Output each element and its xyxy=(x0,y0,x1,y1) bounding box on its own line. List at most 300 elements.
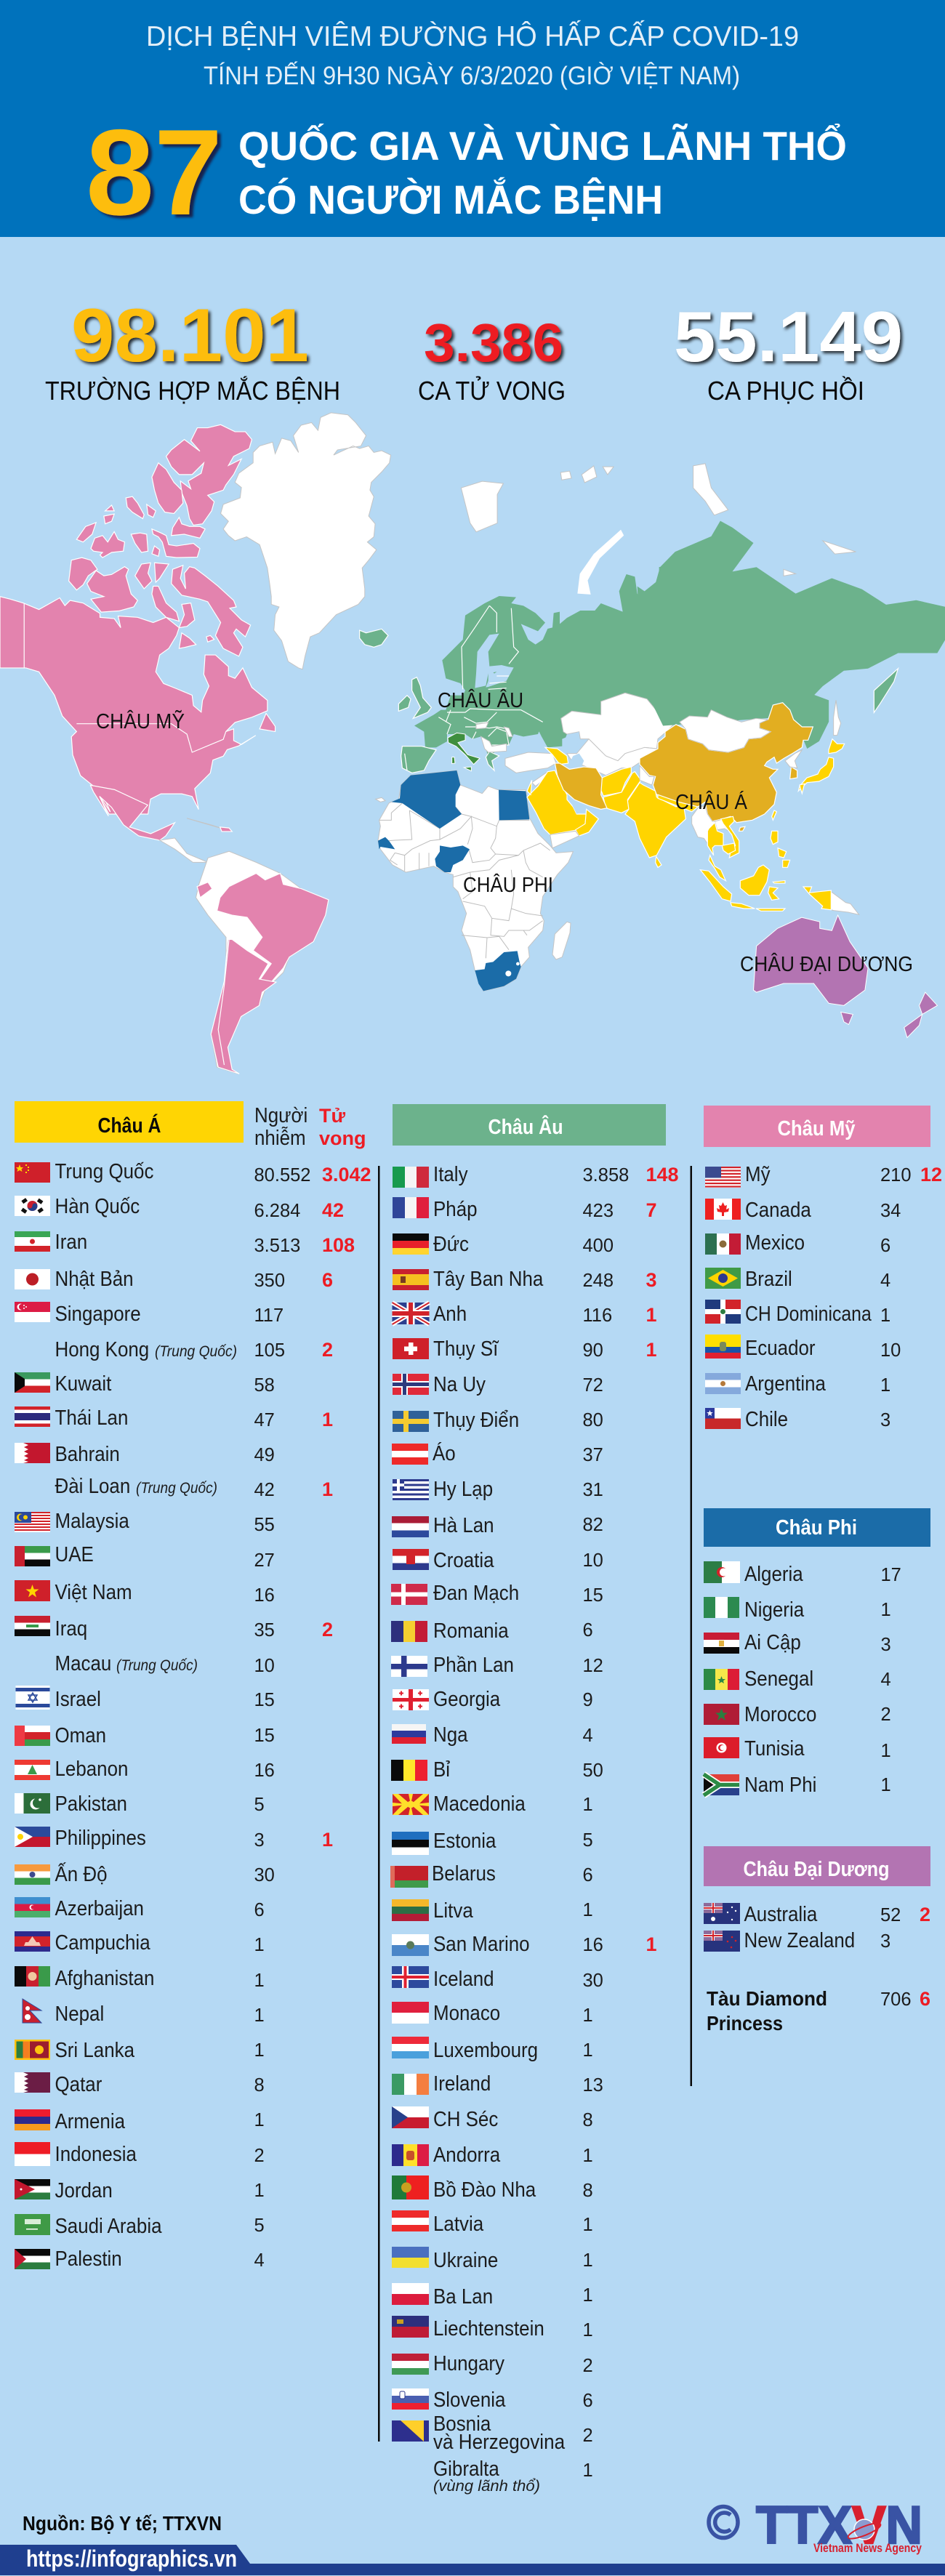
row: Hàn Quốc: 6.284 xyxy=(254,1201,300,1221)
row: Macau xyxy=(55,1651,275,1676)
row: Chile xyxy=(705,1407,890,1430)
panel: Oceania xyxy=(704,1846,930,1952)
row: Iran xyxy=(15,1230,355,1256)
heading: Châu Đại Dương: Châu Đại Dương xyxy=(743,1858,890,1881)
row: Iraq: 2 xyxy=(322,1619,333,1641)
row: New Zealand: 3 xyxy=(880,1931,890,1952)
flag: Pakistan xyxy=(15,1793,50,1814)
row: Thụy Sĩ: 90 xyxy=(583,1340,603,1361)
row: Hungary: 2 xyxy=(583,2356,593,2376)
row: Ukraine: 1 xyxy=(583,2250,593,2271)
map label: Oceania: CHÂU ĐẠI DƯƠNG xyxy=(740,952,913,976)
flag: Kuwait xyxy=(15,1372,50,1393)
flag: San Marino xyxy=(392,1934,429,1956)
row: Nam Phi xyxy=(704,1773,891,1796)
row: Italy: Italy xyxy=(433,1162,468,1186)
row: Saudi Arabia: Saudi Arabia xyxy=(55,2214,162,2237)
row: Israel: 15 xyxy=(254,1690,275,1710)
row: Brazil: 4 xyxy=(880,1271,890,1291)
column header: infected: Người xyxy=(254,1103,307,1127)
flag: Denmark xyxy=(391,1584,427,1605)
row: Đài Loan: Đài Loan xyxy=(55,1474,130,1497)
column header: deaths: vong xyxy=(319,1127,366,1149)
row: Armenia: Armenia xyxy=(55,2109,126,2133)
row: Hàn Quốc: Hàn Quốc xyxy=(55,1194,140,1217)
flag: New Zealand xyxy=(704,1931,740,1952)
row: Iran: 108 xyxy=(322,1234,355,1256)
row: Pakistan: Pakistan xyxy=(55,1792,127,1815)
heading: Châu Đại Dương xyxy=(704,1846,930,1886)
row: Bahrain: 49 xyxy=(254,1445,275,1465)
flag: Croatia xyxy=(393,1549,429,1570)
row: Nepal: Nepal xyxy=(55,2002,104,2025)
panel: Americas xyxy=(704,1106,942,1430)
flag: Lebanon xyxy=(15,1760,50,1780)
row: Belarus xyxy=(390,1861,593,1888)
row: Đan Mạch xyxy=(391,1581,603,1606)
row: Iraq: 35 xyxy=(254,1620,275,1641)
row: Malaysia: 55 xyxy=(254,1515,275,1535)
flag: Greece xyxy=(393,1479,429,1500)
row: Macau: 10 xyxy=(254,1656,275,1676)
row: Nga xyxy=(392,1723,593,1746)
row: Singapore xyxy=(15,1302,284,1326)
logo: TTXVN: Vietnam News Agency xyxy=(813,2541,922,2555)
row: Senegal xyxy=(704,1667,891,1690)
row: Macedonia: Macedonia xyxy=(433,1792,526,1815)
row: Luxembourg: 1 xyxy=(583,2040,593,2061)
heading: Châu Âu xyxy=(393,1104,666,1146)
row: Tây Ban Nha: 3 xyxy=(646,1269,657,1291)
flag: South Africa xyxy=(704,1774,739,1795)
flag: Cambodia xyxy=(15,1931,50,1952)
row: Qatar xyxy=(15,2072,265,2096)
flag: Iran xyxy=(15,1231,50,1252)
row: Brazil xyxy=(705,1267,890,1291)
row: Lebanon: Lebanon xyxy=(55,1757,128,1780)
row: Romania: Romania xyxy=(433,1619,510,1642)
row: Azerbaijan xyxy=(15,1896,265,1920)
row: Argentina xyxy=(705,1372,890,1396)
flag: Sweden xyxy=(393,1411,429,1432)
row: Ba Lan xyxy=(392,2283,593,2308)
map: North America and Greenland xyxy=(0,413,390,814)
row: Philippines xyxy=(15,1826,333,1851)
panel: Diamond Princess xyxy=(707,1987,930,2034)
row: Ai Cập: Ai Cập xyxy=(744,1630,801,1654)
row: Hong Kong xyxy=(55,1337,333,1361)
header banner xyxy=(0,0,945,241)
row: Jordan: 1 xyxy=(254,2181,265,2201)
row: Indonesia: 2 xyxy=(254,2146,265,2166)
flag: Sri Lanka xyxy=(15,2040,50,2060)
row: Indonesia: Indonesia xyxy=(55,2142,137,2165)
row: Singapore: 117 xyxy=(254,1305,284,1326)
flag: Jordan xyxy=(15,2179,50,2199)
row: Thụy Điển xyxy=(393,1408,603,1432)
row: Thái Lan: Thái Lan xyxy=(55,1406,128,1429)
row: Litva: 1 xyxy=(583,1900,593,1920)
row: Tây Ban Nha xyxy=(393,1267,657,1291)
row: Mỹ: 12 xyxy=(920,1164,942,1186)
flag: Austria xyxy=(392,1444,428,1465)
row: San Marino xyxy=(392,1932,657,1956)
stat: deaths: 3.386 xyxy=(424,313,563,373)
row: Iceland: 30 xyxy=(583,1971,603,1991)
row: San Marino: 1 xyxy=(646,1933,657,1955)
row: Trung Quốc: Trung Quốc xyxy=(55,1159,153,1183)
icon: globe xyxy=(846,2519,882,2542)
row: Ai Cập: 3 xyxy=(881,1635,891,1655)
stat: cases xyxy=(45,294,340,406)
row: Đài Loan xyxy=(55,1474,333,1500)
row: Brazil: Brazil xyxy=(745,1267,792,1290)
map label: Asia: CHÂU Á xyxy=(675,790,748,814)
flag: Azerbaijan xyxy=(15,1897,50,1917)
flag: Estonia xyxy=(392,1832,429,1855)
row: Andorra xyxy=(392,2143,593,2166)
row: Tây Ban Nha: 248 xyxy=(583,1271,614,1291)
flag: Canada xyxy=(705,1199,741,1220)
flag: South Korea xyxy=(15,1196,50,1216)
row: Australia: 52 xyxy=(880,1905,901,1925)
stat: deaths xyxy=(418,313,566,406)
row: Nhật Bản: Nhật Bản xyxy=(55,1267,134,1290)
flag: Brazil xyxy=(705,1268,741,1289)
row: Morocco: 2 xyxy=(881,1704,891,1725)
row: CH Dominicana: 1 xyxy=(880,1305,890,1326)
row: Macau: (Trung Quốc) xyxy=(116,1657,198,1674)
row: Bosnia và Herzegovina: Bosnia xyxy=(433,2412,491,2435)
row: Pháp: Pháp xyxy=(433,1197,478,1220)
headline line 1: QUỐC GIA VÀ VÙNG LÃNH THỔ xyxy=(238,123,847,169)
row: Việt Nam xyxy=(15,1580,275,1606)
row: Monaco: 1 xyxy=(583,2005,593,2026)
row: Iraq: Iraq xyxy=(55,1617,87,1640)
row: Na Uy: Na Uy xyxy=(433,1372,486,1396)
row: Macedonia xyxy=(393,1792,593,1815)
map: Russia east and Arctic islands xyxy=(461,464,945,749)
flag: China xyxy=(15,1162,50,1183)
row: Đan Mạch: 15 xyxy=(583,1585,603,1606)
row: Croatia xyxy=(393,1548,603,1571)
row: Áo: 37 xyxy=(583,1445,603,1465)
row: Qatar: 8 xyxy=(254,2075,265,2096)
row: Andorra: 1 xyxy=(583,2146,593,2166)
row: Macedonia: 1 xyxy=(583,1795,593,1815)
row: Liechtenstein xyxy=(392,2316,593,2340)
row: Áo: Áo xyxy=(433,1441,456,1465)
row: Na Uy xyxy=(393,1372,603,1396)
row: Nhật Bản: 350 xyxy=(254,1271,285,1291)
row: Na Uy: 72 xyxy=(583,1375,603,1396)
row: Jordan xyxy=(15,2178,265,2202)
flag: Czech Republic xyxy=(392,2106,429,2128)
row: Hà Lan: 82 xyxy=(583,1515,603,1535)
row: Ecuador xyxy=(705,1335,901,1361)
row: Mexico xyxy=(705,1231,890,1256)
row: Việt Nam: 16 xyxy=(254,1585,275,1606)
row: Romania xyxy=(391,1619,593,1642)
row: Hong Kong: Hong Kong xyxy=(55,1337,149,1361)
flag: Algeria xyxy=(704,1561,740,1583)
row: Hàn Quốc: 42 xyxy=(322,1199,344,1221)
row: Georgia: 9 xyxy=(583,1690,593,1710)
logo: TTXVN: TTXVN xyxy=(756,2496,922,2555)
stat: deaths: CA TỬ VONG xyxy=(418,375,566,406)
row: Anh: 116 xyxy=(583,1305,612,1326)
row: Mexico: Mexico xyxy=(745,1231,805,1254)
row: Liechtenstein: 1 xyxy=(583,2320,593,2340)
row: Bồ Đào Nha: Bồ Đào Nha xyxy=(433,2178,536,2201)
row: Bỉ xyxy=(391,1758,603,1781)
flag: Andorra xyxy=(392,2144,429,2166)
row: Morocco: Morocco xyxy=(744,1702,816,1726)
row: Áo xyxy=(392,1441,603,1465)
row: Sri Lanka xyxy=(15,2038,265,2061)
row: Croatia: Croatia xyxy=(433,1548,494,1571)
row: Anh: Anh xyxy=(433,1302,467,1325)
flag: Egypt xyxy=(704,1633,739,1654)
heading: Châu Á xyxy=(15,1101,244,1143)
flag: Israel xyxy=(16,1686,49,1710)
row: Anh xyxy=(393,1302,657,1326)
row: Georgia xyxy=(393,1687,593,1710)
row: Ecuador: Ecuador xyxy=(745,1336,816,1359)
row: Thái Lan xyxy=(15,1406,333,1430)
row: Gibralta: (vùng lãnh thổ) xyxy=(433,2478,540,2495)
flag: Nigeria xyxy=(704,1597,739,1618)
flag: Spain xyxy=(393,1269,429,1290)
row: Senegal: Senegal xyxy=(744,1667,813,1690)
row: Monaco xyxy=(392,2001,593,2026)
flag: Singapore xyxy=(15,1302,50,1322)
row: Gibralta: Gibralta xyxy=(433,2457,500,2480)
flag: Liechtenstein xyxy=(392,2316,429,2338)
flag: Iraq xyxy=(15,1616,50,1636)
row: Bosnia và Herzegovina xyxy=(392,2412,593,2453)
row: New Zealand: New Zealand xyxy=(744,1928,855,1952)
row: Campuchia: Campuchia xyxy=(55,1931,150,1954)
row: Hy Lạp: 31 xyxy=(583,1480,603,1500)
row: Chile: Chile xyxy=(745,1407,788,1430)
Italy xyxy=(448,733,480,765)
stat: recovered: 55.149 xyxy=(674,297,903,377)
map label: Americas: CHÂU MỸ xyxy=(96,709,185,733)
row: Estonia: 5 xyxy=(583,1830,593,1851)
row: Sri Lanka: Sri Lanka xyxy=(55,2038,135,2061)
row: Canada: Canada xyxy=(745,1198,812,1221)
flag: UAE xyxy=(15,1546,50,1566)
row: Azerbaijan: Azerbaijan xyxy=(55,1896,144,1920)
row: Algeria: Algeria xyxy=(744,1562,804,1585)
flag: Bosnia and Herzegovina xyxy=(392,2420,429,2442)
row: Ấn Độ: 30 xyxy=(254,1865,275,1885)
flag: Japan xyxy=(15,1269,50,1289)
flag: United Kingdom xyxy=(393,1303,429,1324)
row: Đài Loan: 42 xyxy=(254,1480,275,1500)
row: Đức: Đức xyxy=(433,1232,469,1255)
flag: Afghanistan xyxy=(15,1966,50,1987)
row: Azerbaijan: 6 xyxy=(254,1900,265,1920)
row: Nam Phi: 1 xyxy=(881,1775,891,1795)
panel: Europe xyxy=(390,1104,679,2495)
row: Palestin xyxy=(15,2247,265,2271)
row: Ba Lan: 1 xyxy=(583,2285,593,2306)
row: Hàn Quốc xyxy=(15,1194,344,1221)
row: Đức: 400 xyxy=(583,1236,614,1256)
row: Australia xyxy=(704,1902,930,1925)
flag: Ukraine xyxy=(392,2247,429,2268)
row: Mexico: 6 xyxy=(880,1236,890,1256)
row: Hy Lạp xyxy=(393,1477,603,1500)
row: Tunisia: Tunisia xyxy=(744,1736,805,1760)
row: Ireland: Ireland xyxy=(433,2072,491,2095)
row: Bahrain: Bahrain xyxy=(55,1442,120,1465)
row: Trung Quốc xyxy=(15,1159,371,1186)
row: Nga: 4 xyxy=(583,1726,593,1746)
flag: Poland xyxy=(392,2283,429,2305)
row: Slovenia: 6 xyxy=(583,2391,593,2411)
map: Africa xyxy=(376,770,573,991)
row: Bosnia và Herzegovina: và Herzegovina xyxy=(433,2430,566,2453)
row: Iran: 3.513 xyxy=(254,1236,300,1256)
row: Ireland xyxy=(392,2072,603,2096)
row: Mỹ xyxy=(705,1162,942,1188)
row: Romania: 6 xyxy=(583,1620,593,1641)
row: Latvia xyxy=(392,2210,593,2235)
flag: Malaysia xyxy=(15,1512,50,1532)
panel: Diamond Princess: Princess xyxy=(707,2012,783,2034)
row: Hungary: Hungary xyxy=(433,2351,504,2375)
row: Đan Mạch: Đan Mạch xyxy=(433,1581,519,1604)
map: East and Southeast Asia xyxy=(640,700,859,914)
row: Qatar: Qatar xyxy=(55,2072,102,2096)
row: Thụy Sĩ: 1 xyxy=(646,1339,657,1361)
row: Philippines: Philippines xyxy=(55,1826,146,1849)
row: Jordan: Jordan xyxy=(55,2178,113,2202)
panel: Diamond Princess: 6 xyxy=(920,1988,930,2010)
row: Bồ Đào Nha: 8 xyxy=(583,2181,593,2201)
row: Iceland: Iceland xyxy=(433,1967,494,1990)
row: Hong Kong: (Trung Quốc) xyxy=(155,1343,237,1360)
row: Ấn Độ xyxy=(15,1862,275,1885)
flag: Senegal xyxy=(704,1669,739,1690)
row: Tây Ban Nha: Tây Ban Nha xyxy=(433,1267,544,1290)
row: Saudi Arabia: 5 xyxy=(254,2215,265,2236)
row: Anh: 1 xyxy=(646,1304,657,1326)
flag: Palestine xyxy=(15,2249,50,2269)
row: Trung Quốc: 3.042 xyxy=(322,1164,371,1186)
row: Tunisia xyxy=(704,1736,891,1761)
row: Sri Lanka: 1 xyxy=(254,2040,265,2061)
row: Australia: Australia xyxy=(744,1902,818,1925)
column header: infected xyxy=(254,1103,307,1149)
row: Bồ Đào Nha xyxy=(392,2175,593,2201)
row: Ireland: 13 xyxy=(583,2075,603,2096)
flag: Norway xyxy=(393,1374,429,1395)
row: Oman: Oman xyxy=(55,1723,106,1747)
flag: Iceland xyxy=(392,1966,429,1988)
row: Iran: Iran xyxy=(55,1230,87,1253)
heading: Châu Á: Châu Á xyxy=(97,1113,161,1138)
row: UAE xyxy=(15,1542,275,1571)
row: Palestin: 4 xyxy=(254,2250,265,2271)
row: Andorra: Andorra xyxy=(433,2143,501,2166)
source note: Nguồn: Bộ Y tế; TTXVN xyxy=(23,2512,222,2535)
flag: Australia xyxy=(704,1903,740,1924)
map label: Europe: CHÂU ÂU xyxy=(438,688,523,712)
row: Tunisia: 1 xyxy=(881,1741,891,1761)
row: Belarus: 6 xyxy=(583,1865,593,1885)
flag: Luxembourg xyxy=(392,2037,429,2058)
row: Nam Phi: Nam Phi xyxy=(744,1773,816,1796)
flag: Argentina xyxy=(705,1373,741,1394)
row: Senegal: 4 xyxy=(881,1670,891,1690)
row: Malaysia: Malaysia xyxy=(55,1509,130,1532)
row: Slovenia: Slovenia xyxy=(433,2388,506,2411)
row: Philippines: 3 xyxy=(254,1830,265,1851)
row: Iceland xyxy=(392,1966,603,1991)
row: Hà Lan: Hà Lan xyxy=(433,1513,494,1537)
row: Litva xyxy=(392,1899,593,1922)
row: Afghanistan: Afghanistan xyxy=(55,1966,154,1989)
heading: Châu Mỹ xyxy=(704,1106,930,1147)
row: Nepal xyxy=(23,1999,265,2026)
row: Ba Lan: Ba Lan xyxy=(433,2285,493,2308)
row: Oman: 15 xyxy=(254,1726,275,1746)
row: Thụy Sĩ: Thụy Sĩ xyxy=(433,1337,499,1360)
flag: Belarus xyxy=(390,1866,428,1888)
heading: Châu Mỹ: Châu Mỹ xyxy=(778,1117,855,1140)
row: Latvia: Latvia xyxy=(433,2212,484,2235)
row: Đài Loan: (Trung Quốc) xyxy=(136,1480,217,1497)
row: Hong Kong: 2 xyxy=(322,1339,333,1361)
row: Kuwait: Kuwait xyxy=(55,1372,112,1395)
row: Afghanistan: 1 xyxy=(254,1971,265,1991)
flag: Switzerland xyxy=(393,1338,429,1359)
row: Thụy Điển: 80 xyxy=(583,1410,603,1430)
stat: cases: TRƯỜNG HỢP MẮC BỆNH xyxy=(45,375,340,406)
flag: Romania xyxy=(391,1621,427,1642)
row: Thái Lan: 47 xyxy=(254,1410,275,1430)
row: Nhật Bản: 6 xyxy=(322,1269,333,1291)
row: Đức xyxy=(393,1232,614,1256)
row: Liechtenstein: Liechtenstein xyxy=(433,2317,544,2340)
row: Canada xyxy=(705,1198,901,1221)
row: Saudi Arabia xyxy=(15,2214,265,2237)
column header: deaths xyxy=(319,1105,366,1149)
row: Singapore: Singapore xyxy=(55,1302,141,1325)
row: Pháp xyxy=(393,1197,657,1221)
flag: Ireland xyxy=(392,2074,429,2095)
flag: North Macedonia xyxy=(393,1794,429,1815)
row: Hong Kong: 105 xyxy=(254,1340,285,1361)
flag: Mexico xyxy=(705,1233,741,1255)
row: Thụy Sĩ xyxy=(393,1337,657,1361)
row: Nigeria: Nigeria xyxy=(744,1598,805,1621)
row: Lebanon: 16 xyxy=(254,1760,275,1781)
big number 87: 87 xyxy=(86,104,222,241)
map: Europe, Russia and West Asia xyxy=(398,567,707,858)
row: Bosnia và Herzegovina: 2 xyxy=(583,2426,593,2446)
row: Bỉ: 50 xyxy=(583,1760,603,1781)
stat: recovered xyxy=(674,297,903,406)
world map xyxy=(0,413,945,1074)
flag: Oman xyxy=(15,1726,50,1746)
flag: Tunisia xyxy=(704,1737,739,1758)
row: Algeria xyxy=(704,1561,901,1585)
